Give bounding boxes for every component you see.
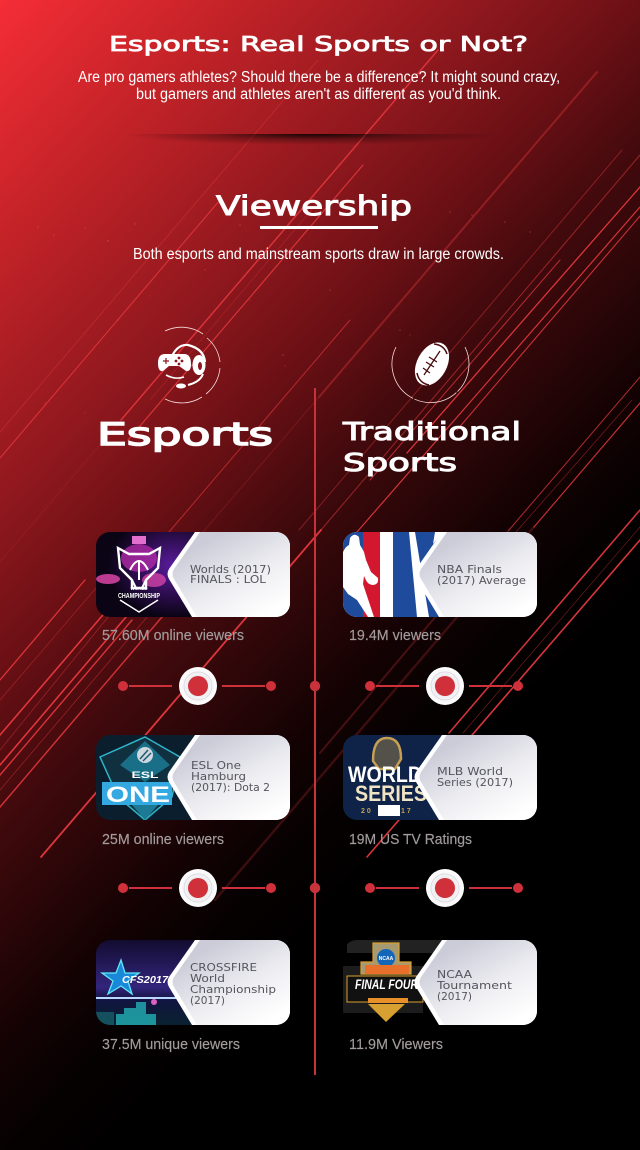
logo: World Championship: WORLD <box>130 586 148 591</box>
card label <box>190 962 276 1007</box>
card: Crossfire <box>96 940 290 1025</box>
card label: World <box>190 973 225 985</box>
intro paragraph: but gamers and athletes aren't as different as you'd think. <box>136 86 501 103</box>
card: NCAA Tournament <box>343 940 537 1025</box>
logo: World Series: WORLD <box>348 762 422 787</box>
logo: NBA <box>343 532 453 617</box>
section subtitle: Both esports and mainstream sports draw in large crowds. <box>133 246 504 263</box>
icon: american football <box>392 337 469 403</box>
card label: NBA Finals <box>437 564 502 576</box>
stat: 11.9M: 11.9M Viewers <box>349 1037 443 1053</box>
card label: FINALS : LOL <box>190 574 266 586</box>
card label: MLB World <box>437 766 503 778</box>
card label: NCAA <box>437 969 473 981</box>
text panel <box>168 532 290 617</box>
card label: Hamburg <box>191 771 246 783</box>
connector: left row 2 <box>118 869 276 907</box>
card label: CROSSFIRE <box>190 962 257 974</box>
stat: 37.5M: 37.5M unique viewers <box>102 1037 240 1053</box>
card: NBA Finals <box>343 532 537 617</box>
text panel <box>414 735 537 820</box>
card label <box>437 766 513 789</box>
title: Esports: Real Sports or Not? <box>109 32 528 56</box>
intro paragraph <box>78 69 560 103</box>
text panel <box>414 532 537 617</box>
stat: 19.4M: 19.4M viewers <box>349 628 441 644</box>
card label <box>437 564 526 587</box>
logo: Final Four: FINAL FOUR <box>355 976 419 992</box>
stat: 57.60M: 57.60M online viewers <box>102 628 244 644</box>
card label: Worlds (2017) <box>190 564 271 576</box>
card: Worlds 2017 <box>96 532 290 617</box>
diagonal light streaks <box>0 50 640 900</box>
stat: 19M: 19M US TV Ratings <box>349 832 472 848</box>
logo: CFS 2017: CFS2017 <box>122 975 168 986</box>
card label: (2017): Dota 2 <box>191 782 270 794</box>
card label <box>190 564 271 586</box>
logo: ESL One: ONE <box>106 782 170 807</box>
logo: World Championship <box>96 532 206 617</box>
column heading: Traditional Sports <box>342 417 521 477</box>
column heading: Traditional Sports: Sports <box>343 448 457 477</box>
icon: gamepad with headset <box>158 327 220 403</box>
card label: (2017) Average <box>437 575 526 587</box>
connector: right row 1 <box>365 667 523 705</box>
logo: World Series: 2 0 <box>361 808 371 815</box>
header shadow divider <box>136 134 478 144</box>
connector: left row 1 <box>118 667 276 705</box>
card: ESL One <box>96 735 290 820</box>
column heading: Traditional Sports: Traditional <box>342 417 521 446</box>
card label: (2017) <box>190 995 225 1007</box>
centre divider line <box>310 388 320 1075</box>
logo: Final Four <box>343 940 442 1022</box>
logo: World Championship: CHAMPIONSHIP <box>118 593 160 600</box>
card label: Tournament <box>436 980 512 992</box>
logo: World Series: SERIES <box>355 781 427 806</box>
logo: World Series <box>343 735 453 820</box>
stat: 25M: 25M online viewers <box>102 832 224 848</box>
card: MLB World Series <box>343 735 537 820</box>
card label: Series (2017) <box>437 777 513 789</box>
card label: ESL One <box>191 760 241 772</box>
card label: Championship <box>190 984 276 996</box>
logo: ESL One: ESL <box>132 770 159 780</box>
heading underline <box>260 226 378 229</box>
logo: ESL One <box>96 735 206 820</box>
card label <box>191 760 270 794</box>
intro paragraph: Are pro gamers athletes? Should there be a difference? It might sound crazy, <box>78 69 560 86</box>
card label <box>436 969 512 1003</box>
logo: World Series: 1 7 <box>401 808 411 815</box>
logo: Final Four: NCAA <box>379 956 394 962</box>
section heading: Viewership: Viewership <box>216 191 412 222</box>
particle dust <box>37 211 531 414</box>
text panel <box>168 735 290 820</box>
connector: right row 2 <box>365 869 523 907</box>
column heading: Esports: Esports <box>97 417 273 453</box>
text panel <box>414 940 537 1025</box>
text panel <box>168 940 290 1025</box>
card label: (2017) <box>437 991 472 1003</box>
logo: CFS 2017 <box>96 940 206 1025</box>
